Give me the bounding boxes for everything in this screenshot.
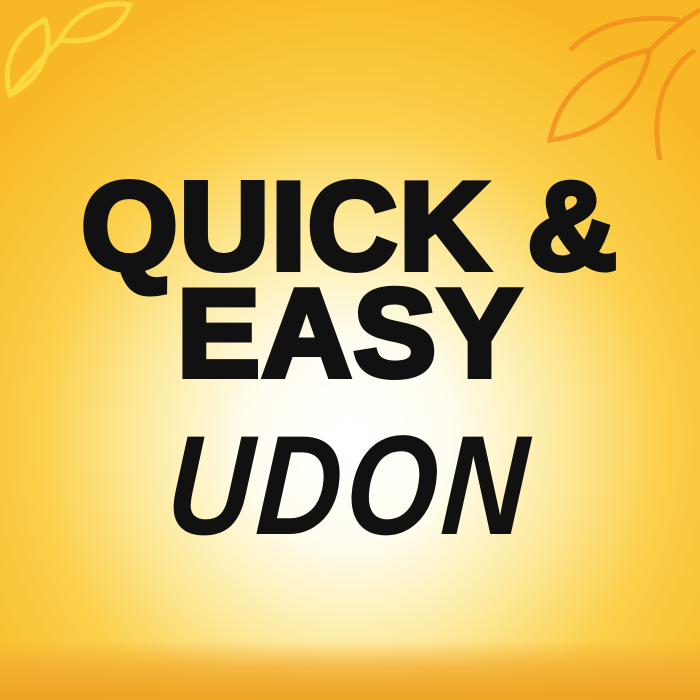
title: UDON (brush script): UDON: [163, 407, 536, 565]
icon: leaves top-left: [4, 1, 134, 98]
title: EASY: EASY: [177, 265, 523, 403]
icon: leaves top-right: [547, 8, 700, 160]
title: QUICK &: QUICK &: [81, 158, 619, 296]
